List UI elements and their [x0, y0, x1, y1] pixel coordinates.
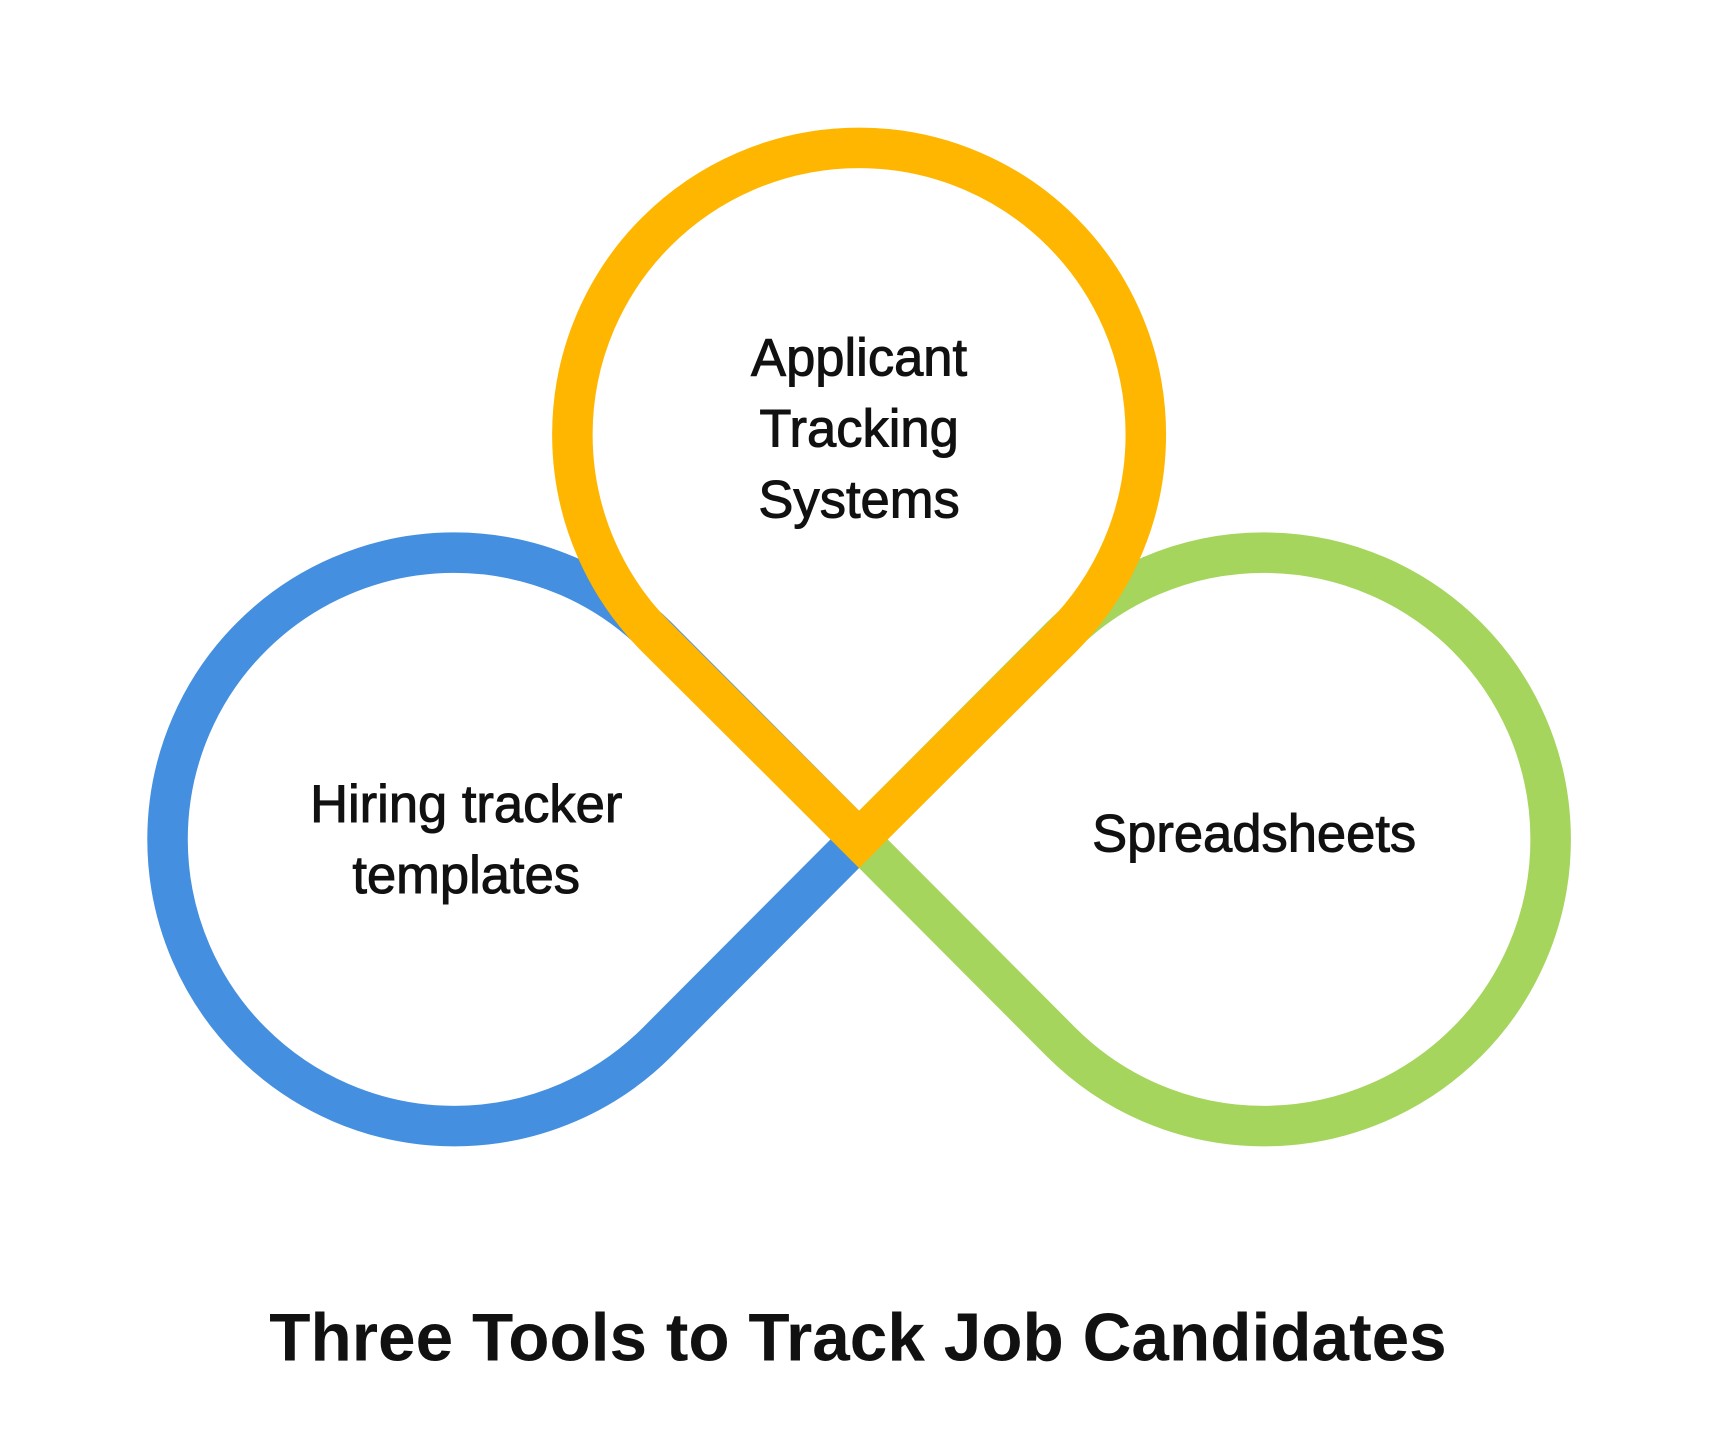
label: Applicant Tracking Systems: Applicant: [751, 328, 968, 387]
label: Hiring tracker templates: Hiring tracker: [310, 775, 622, 834]
label: Applicant Tracking Systems: Tracking: [759, 400, 959, 459]
label: Spreadsheets: Spreadsheets: [1092, 804, 1416, 863]
teardrop: hiring tracker templates (blue): [168, 553, 859, 1126]
label: Hiring tracker templates: templates: [352, 846, 580, 905]
teardrop: spreadsheets (green): [859, 553, 1551, 1126]
label: Applicant Tracking Systems: Systems: [758, 471, 960, 530]
label: Applicant Tracking Systems: [751, 328, 968, 530]
label: Hiring tracker templates: [310, 775, 622, 905]
teardrop: applicant tracking systems (orange): [572, 148, 1146, 839]
title: Three Tools to Track Job Candidates: [269, 1300, 1447, 1375]
